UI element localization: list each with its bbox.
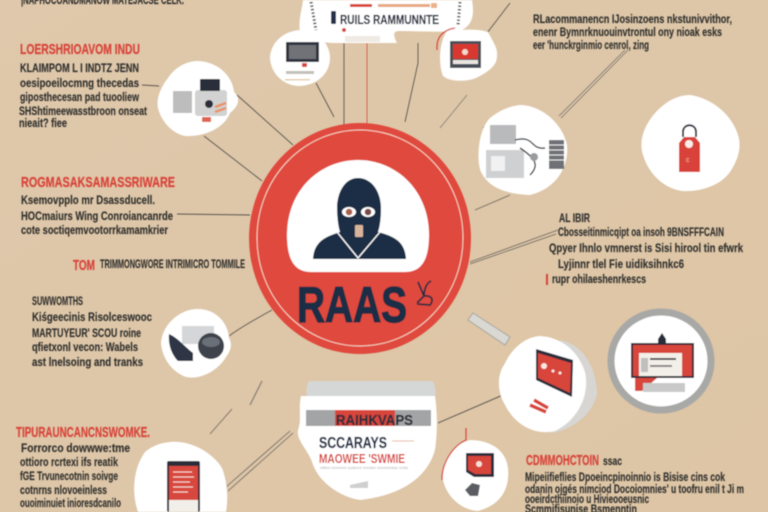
panel: bottom center card: SCCARAYS [319, 435, 387, 452]
icon: small grey card [468, 313, 510, 345]
text block: lower left: MARTUYEUR' SCOU roine [32, 326, 141, 340]
icon: phone blob [134, 442, 227, 512]
text block: bottom right: ooeirdcthiinoio u Hivieooeusnic [525, 492, 649, 506]
icon: red screen blob [437, 28, 497, 81]
text block: bottom left: fGE Trvunecotnin soivge [20, 469, 118, 483]
text block: bottom left: Forrorco dowwwe:tme [21, 441, 130, 455]
text block: upper left: SHShtimeewasstbroon onseat [19, 104, 147, 118]
icon: lock blob: c [686, 157, 690, 164]
text block: bottom left [16, 424, 150, 510]
text block: RaaS heading left: HOCmaiurs Wing Conroiancanrde [21, 209, 173, 223]
text block: middle right [546, 211, 743, 286]
icon: central RAAS badge [249, 123, 471, 354]
icon: disk blob [161, 309, 231, 378]
text block: bottom left: cotnrns nlovoeinless [20, 483, 107, 497]
text block: upper left: oesipoeilocmng thecedas [20, 76, 139, 90]
panel: bottom center card: RAIHKVAPS [336, 412, 413, 429]
text block: RaaS heading left: cote soctiqemvootorrkamamkrier [21, 223, 168, 237]
badge title: RAAS [297, 277, 407, 333]
text block: middle left line: TOM [73, 257, 95, 274]
text block: lower left: ast lnelsoing and tranks [32, 355, 143, 369]
text block: bottom left: ottioro rcrtexi ifs reatik [20, 455, 118, 469]
text block: upper right [533, 12, 732, 52]
panel: bottom center card [298, 381, 437, 500]
text block: upper left [19, 41, 147, 130]
panel: top center banner [299, 0, 473, 43]
small symbol [417, 281, 432, 305]
icon: shield blob [442, 428, 508, 511]
text block: lower left: qfietxonl vecon: Wabels [32, 340, 138, 354]
text block: lower left: Kiśgeecinis Risolceswooc [32, 310, 152, 324]
text block: upper left: nieait? fiee [19, 116, 67, 130]
text block: bottom left: ouoiminuiet inioresdcanilo [20, 496, 121, 510]
text block: bottom right: ssac [603, 454, 622, 468]
text block: middle left line: TRIMMONGWORE INTRIMICRO TOMMILE [100, 257, 245, 271]
text block: bottom right: CDMMOHCTOIN [526, 452, 599, 469]
text block: lower left: SUWWOMTHS [32, 294, 83, 308]
masked figure [313, 178, 406, 259]
icon: laptop blob [499, 336, 597, 433]
icon: computer in grey ring [611, 312, 711, 410]
text block: middle right: Lyjinnr tlel Fie uidiksihnkc6 [558, 257, 684, 271]
text block: middle right: AL IBIR [559, 211, 590, 225]
text block: middle left line [73, 257, 245, 274]
connector lines [142, 3, 628, 491]
icon: machine blob [157, 61, 238, 136]
text block: middle right: rupr ohilaeshenrkescs [552, 272, 646, 286]
icon: lock blob [641, 95, 740, 191]
text block: RaaS heading left [21, 174, 175, 237]
text block: upper right: eer 'hunckrginmio cenrol, zing [533, 38, 649, 52]
text block: RaaS heading left: Ksemovpplo mr Dsassducell. [21, 193, 155, 207]
text block: bottom right [525, 452, 744, 512]
panel: bottom center card: niiinn emnnm soisnni mmisn snnmmiss nniis [320, 466, 408, 470]
icon: monitor blob [270, 30, 330, 86]
text block: upper left: giposthecesan pad tuooliew [20, 90, 139, 104]
panel: bottom center card: MAOWEE 'SWMIE [319, 452, 405, 466]
text block: bottom left: TIPURAUNCANCNSWOMKE. [16, 424, 150, 441]
text block: upper left: LOERSHRIOAVOM INDU [20, 41, 140, 58]
white dome [287, 160, 429, 272]
icon: machinery blob [478, 105, 567, 195]
text block: lower left [32, 294, 152, 369]
panel: top center banner: RUILS RAMMUNNTE [340, 12, 439, 27]
text block: upper left: KLAIMPOM L I INDTZ JENN [20, 61, 139, 75]
text block: RaaS heading left: ROGMASAKSAMASSRIWARE [21, 174, 175, 191]
